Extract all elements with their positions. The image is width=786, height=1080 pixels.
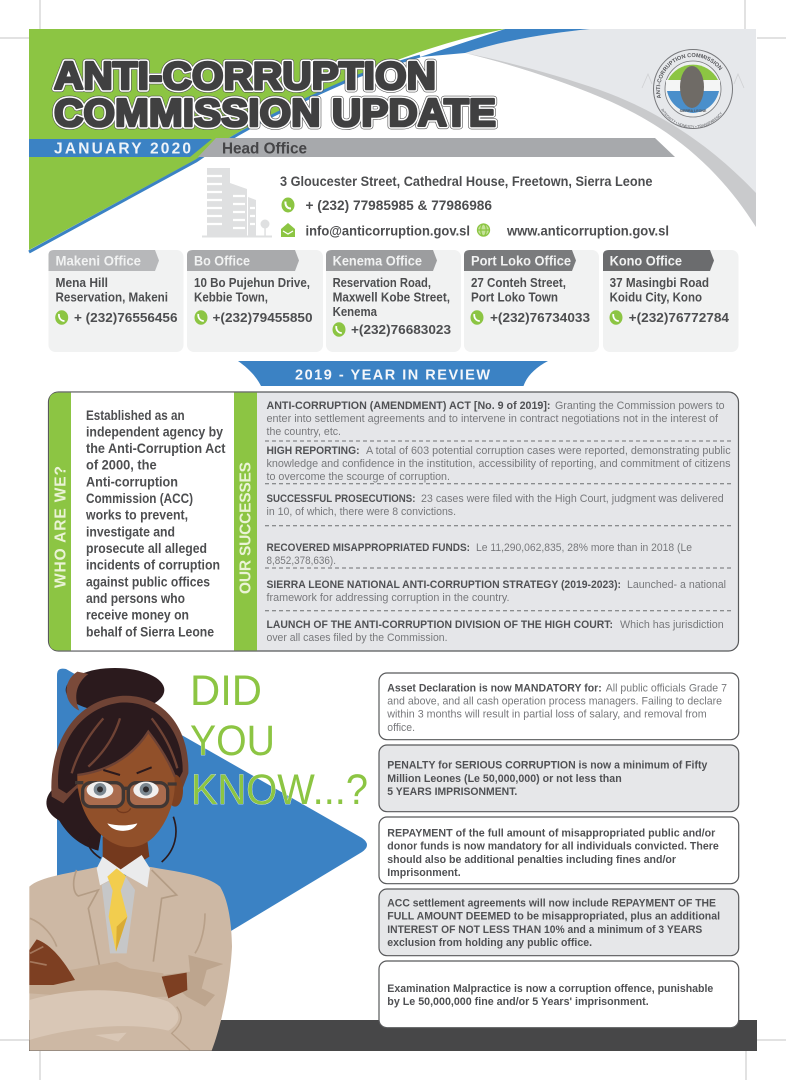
success: prosecutions: 23 cases were filed with the High Court, judgment was delivered	[421, 493, 724, 505]
success: recovered funds: Le 11,290,062,835, 28% more than in 2018 (Le	[476, 542, 692, 554]
who are we description: incidents of corruption	[86, 558, 220, 572]
head office contact details: 3 Gloucester Street, Cathedral House, Freetown, Sierra Leone	[280, 174, 653, 189]
who are we description: independent agency by	[86, 424, 223, 440]
title	[54, 55, 496, 135]
info box: settlement agreements: INTEREST OF NOT LESS THAN 10% and a minimum of 3 YEARS	[387, 924, 703, 936]
info box: penalty: 5 YEARS IMPRISONMENT.	[387, 786, 517, 798]
footer bar	[29, 1020, 757, 1051]
did you know heading	[190, 667, 368, 814]
panel: Kono office: 37 Masingbi Road	[610, 275, 709, 290]
success: amendment act: enter into settlement agreements and to intervene in contract negotiations not in the interest of	[266, 413, 719, 425]
success: high reporting	[266, 445, 731, 483]
info box: asset declaration: office.	[387, 722, 415, 734]
head office heading: Head Office	[222, 140, 307, 158]
success: prosecutions: SUCCESSFUL PROSECUTIONS:	[266, 493, 416, 505]
panel: Bo office	[187, 250, 323, 352]
panel: Makeni office: Makeni Office	[56, 254, 141, 268]
info box: penalty	[379, 745, 739, 812]
panel: Port Loko office: 27 Conteh Street,	[471, 275, 566, 290]
info box: penalty: Million Leones (Le 50,000,000) or not less than	[387, 773, 622, 785]
who are we label: WHO ARE WE?	[52, 466, 70, 588]
panel: Kenema office: Kenema	[333, 304, 378, 319]
success: high reporting: A total of 603 potential corruption cases were reported, demonstrating public	[366, 445, 731, 457]
success: national strategy: framework for addressing corruption in the country.	[266, 592, 510, 604]
who are we description: receive money on	[86, 608, 189, 622]
who are we description: and persons who	[86, 591, 185, 606]
success: high court division: LAUNCH OF THE ANTI-CORRUPTION DIVISION OF THE HIGH COURT:	[266, 619, 613, 631]
success: high court division	[266, 619, 724, 644]
did you know heading: KNOW...?	[191, 766, 368, 814]
head office contact details: www.anticorruption.gov.sl	[506, 224, 669, 238]
jacket	[29, 867, 232, 1051]
our successes label: OUR SUCCESSES	[238, 462, 254, 594]
icon: email	[281, 223, 295, 237]
info box: asset declaration: All public officials Grade 7	[606, 682, 727, 694]
icon: commission logo: SIERRA LEONE	[680, 109, 707, 113]
success: high reporting: HIGH REPORTING:	[266, 445, 360, 457]
success: national strategy	[266, 579, 726, 604]
header background swooshes	[29, 29, 756, 252]
success: recovered funds: 8,852,378,636).	[266, 555, 336, 567]
icon: commission logo	[642, 49, 744, 129]
who are we description: prosecute all alleged	[86, 541, 207, 556]
nose and mouth	[117, 808, 131, 813]
blue play triangle	[57, 669, 367, 1030]
panel: who are we and our successes	[48, 392, 738, 651]
collar	[97, 855, 150, 887]
success: amendment act: the country, etc.	[266, 426, 341, 438]
success: high reporting: to overcome the scourge of corruption.	[266, 471, 450, 483]
head office contact details: + (232) 77985985 & 77986986	[306, 198, 492, 213]
panel: Kenema office	[326, 250, 461, 352]
panel: Port Loko office: Port Loko Office	[471, 254, 571, 268]
upper forearm	[29, 962, 168, 998]
neck	[103, 835, 149, 873]
title: COMMISSION UPDATE	[54, 92, 496, 135]
info box: examination malpractice: Examination Malpractice is now a corruption offence, punishable	[387, 983, 713, 995]
icon: commission logo: ANTI-CORRUPTION COMMISSION	[656, 53, 722, 98]
info box: asset declaration	[379, 673, 739, 740]
panel: Makeni office: Reservation, Makeni	[56, 290, 168, 304]
icon: commission logo: INTEGRITY • HONESTY • TRANSPARENCY	[661, 108, 722, 128]
success: recovered funds	[266, 542, 692, 567]
who are we description: works to prevent,	[85, 508, 188, 522]
info box: repayment: REPAYMENT of the full amount of misappropriated public and/or	[387, 828, 716, 840]
who are we description: Anti-corruption	[86, 474, 178, 490]
success: high court division: Which has jurisdiction	[620, 619, 724, 631]
success: prosecutions	[266, 493, 724, 518]
panel: Port Loko office	[464, 250, 599, 352]
panel: Makeni office	[48, 250, 184, 352]
panel: Port Loko office: +(232)76734033	[490, 310, 590, 325]
info box: settlement agreements: FULL AMOUNT DEEMED to be misappropriated, plus an additional	[387, 910, 720, 922]
info box: examination malpractice: by Le 50,000,000 fine and/or 5 Years' imprisonment.	[387, 996, 649, 1008]
panel: Kenema office: +(232)76683023	[351, 322, 451, 337]
did you know heading: YOU	[190, 717, 275, 765]
who are we description: behalf of Sierra Leone	[86, 624, 214, 640]
info box: asset declaration: Asset Declaration is now MANDATORY for:	[387, 682, 602, 694]
success: prosecutions: in 10, of which, there were 8 convictions.	[266, 506, 456, 518]
title: ANTI-CORRUPTION	[54, 55, 436, 98]
success: national strategy: Launched- a national	[627, 579, 726, 591]
title: COMMISSION UPDATE	[54, 92, 496, 135]
head office contact details	[280, 174, 669, 238]
right hand	[162, 973, 187, 998]
info box: repayment: Imprisonment.	[387, 867, 461, 879]
head hair	[51, 696, 188, 803]
panel: Bo office: 10 Bo Pujehun Drive,	[194, 275, 310, 290]
panel: Bo office: Bo Office	[194, 254, 250, 268]
who are we description: Established as an	[86, 408, 185, 423]
info box: settlement agreements: ACC settlement agreements will now include REPAYMENT OF THE	[387, 898, 716, 910]
banner: year in review	[238, 361, 548, 386]
who are we description: investigate and	[86, 524, 175, 540]
info box: asset declaration: and above, and all cash operation process managers. Failing to declare	[387, 696, 722, 708]
panel: Kono office: Kono Office	[610, 254, 682, 268]
success: high court division: over all cases filed by the Commission.	[266, 632, 448, 644]
panel: Kono office: +(232)76772784	[629, 310, 730, 325]
icon: office building	[202, 168, 272, 238]
icon: globe	[478, 224, 490, 236]
info box: asset declaration: within 3 months will result in partial loss of salary, and removal from	[386, 708, 707, 720]
title: ANTI-CORRUPTION	[54, 55, 436, 98]
fingers	[163, 955, 223, 1007]
info box: examination malpractice	[379, 961, 739, 1028]
info box: repayment: should also be additional penalties including fines and/or	[387, 854, 677, 866]
panel: Kenema office: Maxwell Kobe Street,	[333, 290, 450, 304]
info box: settlement agreements: exclusion from holding any public office.	[387, 937, 592, 949]
panel: Bo office: Kebbie Town,	[194, 290, 268, 304]
face	[77, 732, 175, 847]
who are we description: Commission (ACC)	[86, 491, 193, 506]
success: amendment act: Granting the Commission powers to	[555, 400, 725, 412]
who are we description: against public offices	[86, 574, 210, 590]
hair bun	[66, 668, 164, 712]
info box: settlement agreements	[379, 889, 739, 956]
info box: penalty: PENALTY for SERIOUS CORRUPTION is now a minimum of Fifty	[387, 760, 708, 772]
left hand	[29, 939, 75, 985]
did you know heading: DID	[190, 667, 262, 715]
title: ANTI-CORRUPTION	[54, 55, 436, 98]
back hair	[46, 785, 108, 851]
panel: Makeni office: + (232)76556456	[74, 310, 178, 325]
success: amendment act: ANTI-CORRUPTION (AMENDMENT) ACT [No. 9 of 2019]:	[266, 400, 550, 412]
who are we description: the Anti-Corruption Act	[86, 441, 226, 456]
who are we description	[85, 408, 226, 640]
date label: JANUARY 2020	[54, 140, 191, 158]
who are we description: of 2000, the	[86, 458, 157, 472]
tie	[107, 868, 127, 952]
eyebrows	[103, 767, 152, 775]
panel: Kenema office: Reservation Road,	[333, 275, 431, 290]
lower sleeve	[29, 990, 178, 1040]
glasses	[75, 782, 177, 807]
icon: phone	[282, 198, 294, 212]
panel: Kenema office: Kenema Office	[333, 254, 422, 268]
info box: repayment	[379, 817, 739, 884]
panel: Kono office: Koidu City, Kono	[610, 290, 702, 304]
title: COMMISSION UPDATE	[54, 92, 496, 135]
panel: Kono office	[603, 250, 738, 352]
panel: Bo office: +(232)79455850	[212, 310, 312, 325]
hair strands	[72, 718, 177, 777]
ear	[167, 775, 183, 807]
panel: Makeni office: Mena Hill	[56, 275, 108, 290]
success: national strategy: SIERRA LEONE NATIONAL ANTI-CORRUPTION STRATEGY (2019-2023):	[266, 579, 621, 591]
success: high reporting: knowledge and confidence in the institution, accessibility of reporting, and commitment of citizens	[266, 458, 731, 470]
panel: Port Loko office: Port Loko Town	[471, 290, 558, 304]
illustration: woman	[29, 668, 232, 1051]
success: amendment act	[266, 400, 725, 438]
success: recovered funds: RECOVERED MISAPPROPRIATED FUNDS:	[266, 542, 470, 554]
head office contact details: info@anticorruption.gov.sl	[306, 224, 470, 238]
banner: year in review: 2019 - YEAR IN REVIEW	[295, 368, 490, 384]
info box: repayment: donor funds is now mandatory for all individuals convicted. There	[387, 840, 719, 852]
shirt and lapels	[102, 873, 135, 953]
